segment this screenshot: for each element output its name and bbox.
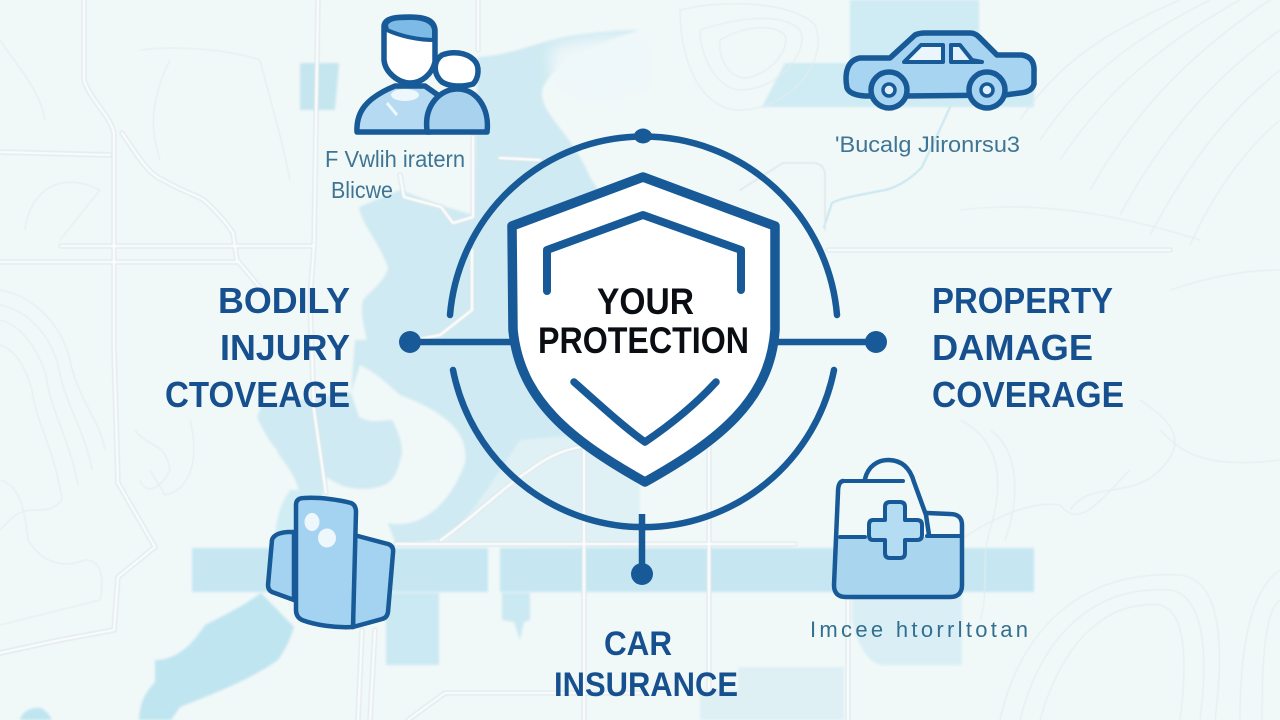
connector: left — [399, 331, 516, 353]
bag lower fill — [835, 537, 961, 596]
small caption: people — [325, 146, 465, 203]
ring upper arc — [450, 137, 837, 315]
shield — [512, 177, 775, 482]
label: bodily injury coverage — [165, 280, 350, 415]
label: property damage coverage: DAMAGE — [932, 327, 1093, 368]
neck highlight — [391, 89, 419, 101]
phone body — [296, 498, 356, 627]
label: car insurance: CAR — [604, 625, 672, 663]
connector: right — [772, 331, 887, 353]
shield outline — [512, 177, 775, 482]
label: bodily injury coverage: INJURY — [220, 327, 350, 368]
icon: car — [846, 33, 1034, 108]
shield inner chevron — [574, 382, 716, 442]
phone dots — [304, 513, 320, 531]
shield title: PROTECTION — [538, 320, 749, 361]
shield title — [538, 281, 749, 361]
small caption: medical bag: Imcee htorrltotan — [810, 617, 1028, 642]
left panel — [268, 532, 294, 600]
small caption: car: 'Bucalg Jlironrsu3 — [835, 132, 1020, 157]
label: bodily injury coverage: BODILY — [218, 280, 350, 321]
big head — [384, 17, 435, 83]
icon: people — [357, 17, 487, 132]
medical cross — [869, 502, 922, 558]
car right wheel — [969, 72, 1005, 108]
ring lower arc — [453, 370, 834, 527]
car left wheel — [871, 72, 907, 108]
icon: medical bag — [834, 460, 962, 597]
label: car insurance: INSURANCE — [554, 666, 738, 704]
small caption: people: Blicwe — [331, 177, 393, 203]
water and land-use areas — [20, 0, 1034, 720]
car body — [846, 33, 1034, 96]
label: bodily injury coverage: CTOVEAGE — [165, 374, 350, 415]
pale land patch — [551, 36, 650, 100]
ring top node — [634, 128, 652, 144]
label: property damage coverage: COVERAGE — [932, 374, 1124, 415]
bag outline — [834, 481, 962, 597]
label: car insurance — [554, 625, 738, 704]
connector: bottom — [631, 514, 653, 585]
shield title: YOUR — [597, 281, 694, 322]
car front window — [904, 45, 943, 62]
icon: phone with side panels — [268, 498, 393, 627]
bag handle — [865, 460, 929, 535]
label: property damage coverage: PROPERTY — [932, 280, 1113, 321]
shield inner top bracket — [547, 215, 741, 291]
small body — [427, 89, 487, 132]
car rear window — [951, 45, 982, 62]
hair — [386, 18, 434, 40]
big body — [357, 86, 445, 132]
small head — [435, 53, 478, 86]
central ring — [450, 128, 837, 527]
right panel — [353, 535, 393, 627]
small caption: people: F Vwlih iratern — [325, 146, 465, 172]
label: property damage coverage — [932, 280, 1124, 415]
